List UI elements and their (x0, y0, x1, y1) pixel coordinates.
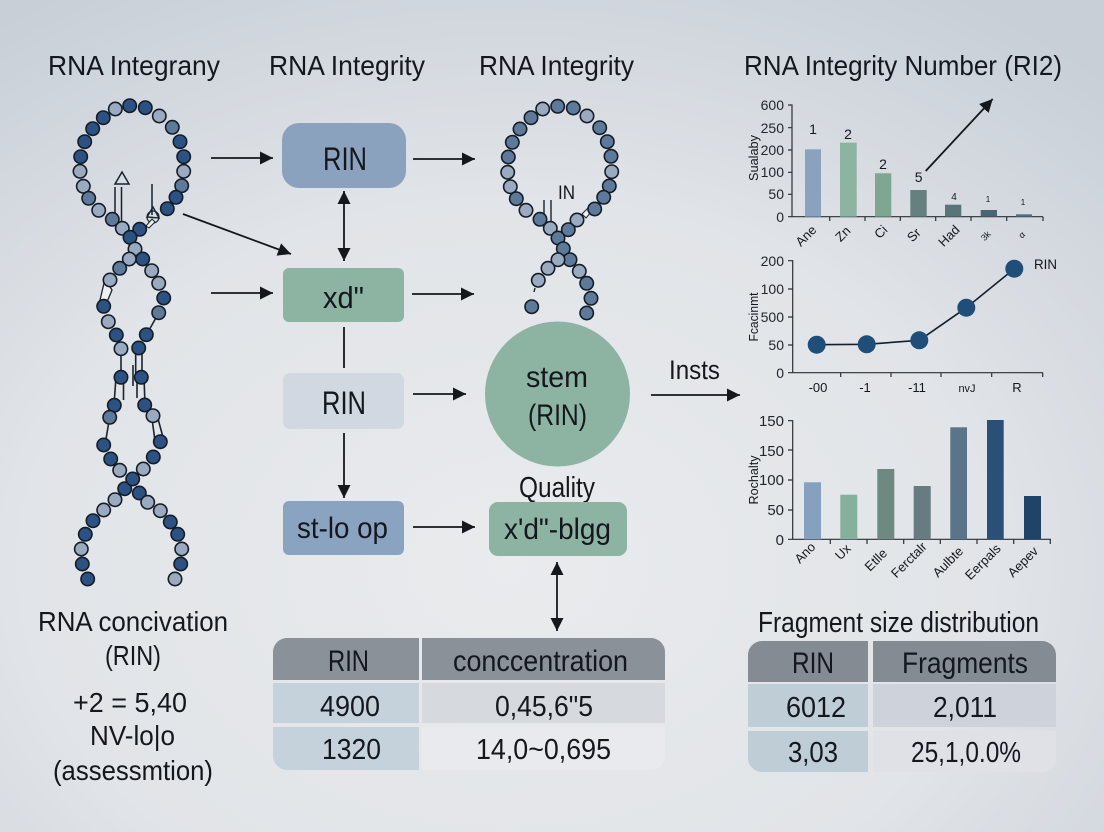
bar chart: top (746, 97, 1043, 250)
bar chart: bottom: Rochalty (746, 455, 761, 504)
table: fragments: RIN (792, 647, 834, 680)
line chart: middle: 200 (761, 253, 784, 269)
bar chart: top: 5 (915, 169, 923, 185)
table: RIN concentration: 1320 (322, 734, 381, 766)
bar chart: top: Had (935, 222, 963, 250)
left text block: RNA concentration: (assessmtion) (53, 755, 213, 786)
flow box: RIN blue: RIN (323, 141, 367, 177)
bar chart: top: Sr (904, 224, 924, 245)
left text block: RNA concentration: (RIN) (105, 640, 161, 671)
bar chart: bottom: 150 (759, 413, 784, 430)
bar chart: top: 1 (809, 121, 817, 137)
flow box: st-lo op: st-lo op (297, 512, 388, 545)
left text block: RNA concentration (38, 606, 228, 786)
title: flow column: RNA Integrity (269, 50, 425, 81)
bar chart: top: 3k (979, 229, 993, 243)
left text block: RNA concentration: NV-lo|o (90, 720, 175, 751)
table: fragments: 25,1,0.0% (911, 737, 1021, 769)
bar chart: top: 4 (951, 192, 957, 203)
bar chart: top: 1 (986, 195, 991, 204)
bar chart: top: 50 (768, 186, 784, 202)
line chart: middle: 500 (761, 309, 784, 325)
line chart: middle: RIN (1034, 256, 1057, 272)
arrows: flow connectors (183, 158, 740, 631)
bar chart: bottom: Aulbte (929, 543, 966, 580)
table: RIN concentration: 4900 (320, 691, 380, 723)
bar chart: top: 2 (844, 126, 852, 142)
bar chart: bottom: Ux (832, 541, 854, 563)
bar chart: top: 600 (761, 97, 784, 113)
table: fragments: 2,011 (933, 692, 997, 724)
label: Insts: Insts (669, 355, 720, 385)
left text block: RNA concentration: +2 = 5,40 (73, 687, 187, 718)
bar chart: top: 200 (761, 142, 784, 158)
bar chart: top: α (1017, 230, 1027, 240)
table: RIN concentration: 14,0~0,695 (476, 734, 611, 766)
bar chart: bottom: Aepev (1004, 543, 1042, 580)
flow circle: stem (RIN) (485, 322, 630, 466)
flow box: xd green: xd" (323, 280, 364, 315)
table: fragments: Fragments (902, 647, 1028, 680)
icon: left RNA strand diagram (73, 99, 190, 586)
table: fragments (748, 641, 1056, 772)
bar chart: bottom: 150 (759, 443, 784, 460)
flow box: RIN pale: RIN (322, 385, 366, 421)
flow box: RIN blue (282, 123, 406, 188)
table: RIN concentration: 0,45,6"5 (495, 691, 593, 723)
bar chart: top: Ci (871, 222, 891, 241)
heading: fragment size distribution: Fragment size distribution (758, 607, 1039, 639)
label: Quality: Quality (519, 472, 595, 504)
bar chart: bottom: Etlle (862, 546, 890, 574)
bar chart: bottom: 100 (759, 472, 784, 489)
line chart: middle (746, 253, 1057, 395)
line chart: middle: Fcacinmt (746, 292, 761, 342)
bar chart: bottom: 0 (776, 532, 784, 549)
table: fragments: 6012 (786, 692, 846, 724)
line chart: middle: R (1012, 380, 1022, 395)
bar chart: top: 2 (879, 156, 887, 172)
flow box: RIN pale (283, 373, 404, 429)
line chart: middle: -1 (859, 380, 871, 395)
left text block: RNA concentration: RNA concivation (38, 606, 228, 637)
bar chart: top: 250 (761, 120, 784, 136)
flow circle: stem (RIN): stem (526, 361, 588, 394)
bar chart: top: 1 (1021, 198, 1026, 207)
table: RIN concentration: RIN (328, 645, 369, 678)
line chart: middle: 100 (761, 281, 784, 297)
flow circle: stem (RIN): (RIN) (528, 399, 587, 432)
bar chart: bottom: Eerpals (962, 541, 1004, 583)
line chart: middle: 0 (776, 365, 784, 381)
table: RIN concentration (273, 638, 665, 770)
flow box: xd green (283, 268, 404, 322)
title: third column: RNA Integrity (479, 50, 634, 81)
bar chart: bottom (746, 413, 1051, 583)
bar chart: bottom: 50 (767, 502, 784, 519)
icon: third column RNA hairpin (501, 100, 618, 320)
title: left column: RNA Integrany (48, 50, 220, 81)
bar chart: top: Zn (832, 223, 853, 244)
table: RIN concentration: conccentration (453, 645, 628, 678)
line chart: middle: nvJ (958, 383, 976, 395)
hairpin label: IN (558, 183, 575, 204)
line chart: middle: -11 (908, 380, 926, 395)
title: charts column: RNA Integrity Number (RI2) (744, 50, 1062, 81)
line chart: middle: 50 (768, 337, 784, 353)
flow box: xd-blgg: x'd"-blgg (504, 513, 611, 546)
bar chart: bottom: Ferctalr (888, 538, 930, 581)
bar chart: top: 100 (761, 164, 784, 180)
line chart: middle: -00 (809, 380, 827, 395)
bar chart: bottom: Ano (791, 539, 818, 566)
flow box: st-lo op (283, 501, 404, 555)
bar chart: top: Sualaby (746, 135, 761, 181)
table: fragments: 3,03 (788, 737, 838, 769)
flow box: xd-blgg (489, 502, 627, 556)
bar chart: top: 0 (776, 209, 784, 225)
bar chart: top: Ane (792, 222, 819, 249)
